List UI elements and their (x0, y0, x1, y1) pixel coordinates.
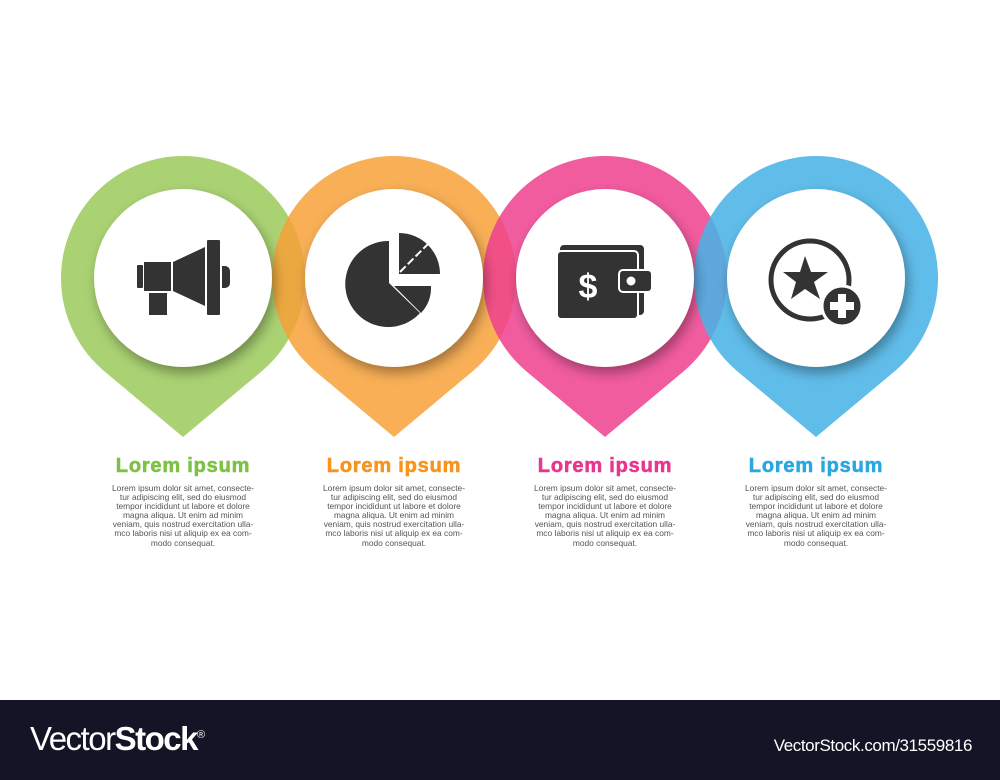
icon: star plus (771, 241, 862, 326)
text 1: tur adipiscing elit, sed do eiusmod (120, 492, 246, 502)
text 2: modo consequat. (362, 538, 426, 548)
text 4: tur adipiscing elit, sed do eiusmod (753, 492, 879, 502)
title 4: Lorem ipsum (749, 455, 883, 477)
footer logo: VectorStock® (30, 720, 204, 757)
text 1: mco laboris nisi ut aliquip ex ea com- (114, 528, 252, 538)
icon: wallet (557, 245, 652, 319)
text 3: modo consequat. (573, 538, 637, 548)
text 4 (745, 483, 887, 548)
pin: orange (272, 156, 516, 437)
text 3 (534, 483, 676, 548)
title 2: Lorem ipsum (327, 455, 461, 477)
text 3: magna aliqua. Ut enim ad minim (545, 510, 665, 520)
text 1 (112, 483, 254, 548)
icon: wallet: $ (579, 268, 598, 306)
text 3: Lorem ipsum dolor sit amet, consecte- (534, 483, 676, 493)
title 1: Lorem ipsum (116, 455, 250, 477)
text 4: Lorem ipsum dolor sit amet, consecte- (745, 483, 887, 493)
title 3: Lorem ipsum (538, 455, 672, 477)
white circles (94, 189, 905, 367)
text 4: magna aliqua. Ut enim ad minim (756, 510, 876, 520)
text 1: veniam, quis nostrud exercitation ulla- (113, 519, 253, 529)
text 4: mco laboris nisi ut aliquip ex ea com- (747, 528, 885, 538)
text 1: Lorem ipsum dolor sit amet, consecte- (112, 483, 254, 493)
pin: green (61, 156, 305, 437)
icon: megaphone (137, 240, 230, 315)
pin: blue (694, 156, 938, 437)
text 2 (323, 483, 465, 548)
text 3: veniam, quis nostrud exercitation ulla- (535, 519, 675, 529)
text 4: veniam, quis nostrud exercitation ulla- (746, 519, 886, 529)
text 4: tempor incididunt ut labore et dolore (749, 501, 883, 511)
icon: pie chart (345, 233, 440, 327)
text 2: mco laboris nisi ut aliquip ex ea com- (325, 528, 463, 538)
text 2: tempor incididunt ut labore et dolore (327, 501, 461, 511)
pin: pink (483, 156, 727, 437)
text 2: magna aliqua. Ut enim ad minim (334, 510, 454, 520)
footer url: VectorStock.com/31559816 (774, 736, 972, 755)
text 1: modo consequat. (151, 538, 215, 548)
text 3: mco laboris nisi ut aliquip ex ea com- (536, 528, 674, 538)
text 4: modo consequat. (784, 538, 848, 548)
text 1: magna aliqua. Ut enim ad minim (123, 510, 243, 520)
text 3: tempor incididunt ut labore et dolore (538, 501, 672, 511)
text 2: veniam, quis nostrud exercitation ulla- (324, 519, 464, 529)
text 2: tur adipiscing elit, sed do eiusmod (331, 492, 457, 502)
footer bar (0, 700, 1000, 780)
text 1: tempor incididunt ut labore et dolore (116, 501, 250, 511)
text 3: tur adipiscing elit, sed do eiusmod (542, 492, 668, 502)
text 2: Lorem ipsum dolor sit amet, consecte- (323, 483, 465, 493)
